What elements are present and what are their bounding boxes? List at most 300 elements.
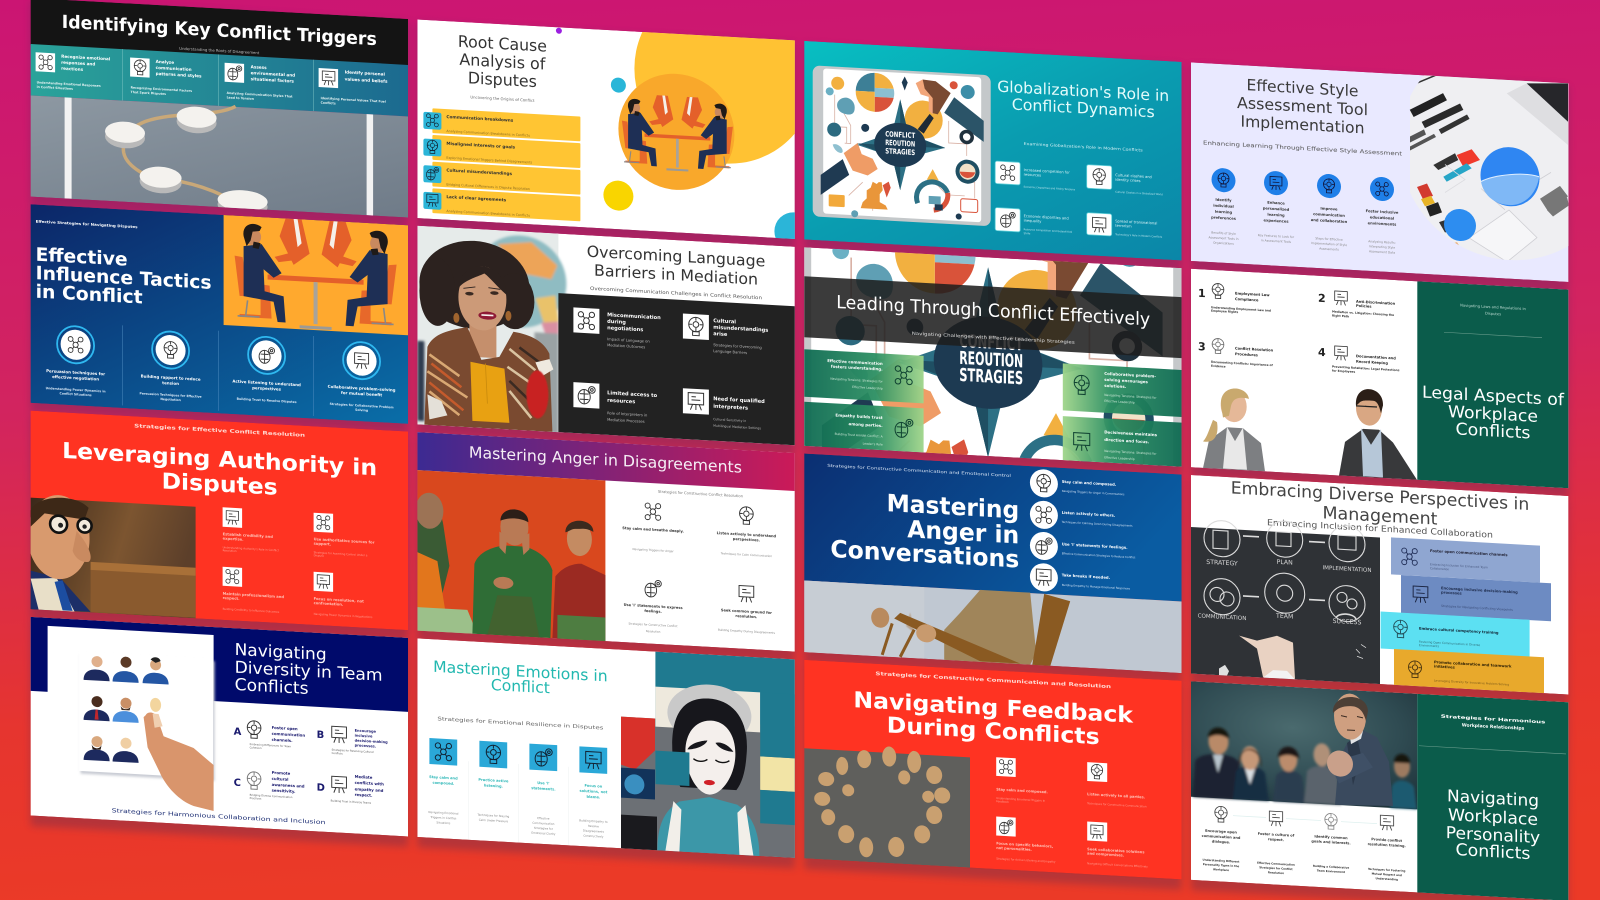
four principles: expertise. bbox=[223, 537, 244, 542]
four strategies: feelings. bbox=[644, 609, 662, 614]
four strategies: Use 'I' statements to express bbox=[624, 603, 683, 610]
panel: Overcoming Language Barriers in Mediation bbox=[417, 226, 795, 447]
numbered item 3: Procedures bbox=[1235, 352, 1258, 357]
title bbox=[458, 32, 547, 92]
four steps with round icons: Effective Communication Strategies to Reduce Conflict bbox=[1062, 551, 1135, 559]
title bbox=[587, 243, 765, 289]
stepped colored blocks bbox=[1381, 537, 1551, 694]
items A to D: Cohesion bbox=[250, 745, 262, 750]
teal band with four columns: Lead to Tension bbox=[227, 95, 254, 101]
four strategy columns: Disagreements bbox=[583, 829, 605, 834]
title: Conflict bbox=[491, 676, 550, 697]
list of four causes: Lack of clear agreements bbox=[446, 194, 507, 202]
items A to D: respect. bbox=[355, 792, 373, 798]
dark panel with four challenges: Limited access to bbox=[607, 390, 658, 399]
callout: communication bbox=[804, 349, 924, 403]
stepped colored blocks: Strategies for Navigating Conflicting Viewpoints bbox=[1441, 604, 1513, 612]
title band: Navigating Challenges with Effective Leadership Strategies bbox=[912, 331, 1076, 346]
four factors: inequality bbox=[1024, 219, 1042, 224]
numbered item 4: for Employees bbox=[1332, 369, 1355, 374]
stepped colored blocks: Leveraging Diversity for Innovative Problem Solving bbox=[1434, 678, 1509, 687]
four habits row: Foster a culture of bbox=[1258, 832, 1295, 838]
four principles: Building Credibility to Influence Outcomes bbox=[223, 607, 280, 614]
callout: collaboration: solving encourages bbox=[1104, 377, 1149, 384]
four strategy columns: Stay calm and bbox=[429, 775, 458, 781]
four principles bbox=[223, 507, 375, 619]
panel: Navigating Feedback During Conflicts bbox=[804, 660, 1182, 879]
numbered item 3: Evidence bbox=[1211, 364, 1226, 369]
four steps: educational bbox=[1370, 215, 1394, 221]
four strategy columns: Constructively bbox=[583, 834, 604, 839]
four habits row: communication and bbox=[1202, 834, 1241, 840]
four tactics: Negotiation bbox=[160, 397, 181, 402]
title: Conflict Dynamics bbox=[1012, 95, 1155, 121]
panel: Mastering Anger in Conversations bbox=[804, 454, 1182, 673]
dark panel with four challenges: arise bbox=[713, 331, 728, 338]
four steps: learning bbox=[1215, 210, 1232, 215]
teal band with four columns: Assess bbox=[251, 64, 267, 70]
four strategy columns: Calm Under Pressure bbox=[479, 818, 508, 823]
items A to D: inclusive bbox=[355, 734, 373, 739]
four feedback tips: and compromises. bbox=[1087, 852, 1124, 858]
four steps: Assessment Data bbox=[1369, 249, 1395, 255]
title: Mastering bbox=[887, 489, 1019, 524]
dark panel with four challenges: Language Barriers bbox=[713, 349, 747, 355]
four tactics: Understanding Power Dynamics in bbox=[46, 386, 106, 393]
four strategy columns: statements. bbox=[531, 786, 556, 792]
teal band with four columns: responses and bbox=[61, 60, 95, 67]
subtitle: Strategies for Constructive Conflict Resolution bbox=[658, 490, 744, 498]
four strategy columns: Use 'I' bbox=[537, 781, 550, 786]
panel: Effective Influence Tactics in Conflict bbox=[31, 204, 408, 424]
panel: Globalization's Role in Conflict Dynamics bbox=[804, 41, 1182, 260]
title bbox=[1231, 478, 1529, 535]
four habits row: Strategies for Conflict bbox=[1259, 865, 1293, 871]
photo: design desk in circular crop bbox=[1410, 75, 1568, 260]
title bbox=[1237, 76, 1368, 138]
four principles: Resolution bbox=[223, 548, 237, 553]
items A to D: Bridging Diverse Communication bbox=[250, 793, 293, 799]
stepped colored blocks: processes bbox=[1441, 590, 1463, 596]
stepped colored blocks: Environments bbox=[1419, 643, 1439, 648]
four factors bbox=[995, 160, 1163, 243]
four steps: Organizations bbox=[1213, 241, 1234, 246]
four strategies: Building Empathy During Disagreements bbox=[718, 628, 775, 635]
illustration: conflict compass poster: STRAGIES bbox=[885, 146, 915, 157]
four tactics: Building Trust to Resolve Disputes bbox=[237, 397, 297, 404]
panel: Identifying Key Conflict Triggers bbox=[31, 0, 408, 225]
four habits row: Mutual Respect and bbox=[1372, 872, 1402, 877]
illustration: conflict compass poster: REOUTION bbox=[885, 138, 915, 149]
four factors: Spread of transnational bbox=[1115, 219, 1157, 226]
callout: empathy: Building Trust Amidst Conflict: A bbox=[835, 432, 884, 439]
items A to D: Building Trust in Diverse Teams bbox=[331, 799, 372, 805]
title: Analysis of bbox=[459, 50, 546, 74]
stepped colored blocks: Encourage inclusive decision-making bbox=[1441, 586, 1518, 595]
four factors: terrorism bbox=[1115, 224, 1132, 229]
stepped colored blocks: Embracing Inclusion for Enhanced Team bbox=[1430, 562, 1488, 569]
photo: smiling woman in front of a globe bbox=[417, 226, 566, 434]
photo: chalkboard diagram: PLAN bbox=[1277, 559, 1293, 567]
title: Management bbox=[1323, 503, 1438, 530]
dark panel with four challenges: misunderstandings bbox=[713, 325, 768, 334]
panel: Navigating Workplace Personality Conflicts bbox=[1191, 681, 1568, 900]
subtitle: Uncovering the Origins of Conflict bbox=[470, 94, 535, 103]
four steps: in Assessment Tools bbox=[1261, 238, 1291, 244]
four steps: Analyzing Results: bbox=[1368, 239, 1396, 245]
items A to D bbox=[234, 720, 388, 808]
numbered item 4: Preventing Retaliation: Legal Protections bbox=[1332, 365, 1400, 372]
four habits row: Resolution bbox=[1268, 870, 1284, 875]
teal band with four columns: reactions bbox=[61, 66, 84, 72]
four strategies: Stay calm and breathe deeply. bbox=[622, 526, 684, 534]
teal band with four columns: situational factors bbox=[251, 76, 294, 84]
callout: collaboration: Effective Leadership bbox=[1104, 399, 1135, 405]
four feedback tips: Understanding Emotional Triggers in bbox=[996, 796, 1045, 803]
four strategies bbox=[622, 500, 777, 640]
four strategy columns: Focus on bbox=[584, 784, 603, 789]
list of four causes: Communication breakdowns bbox=[446, 114, 514, 123]
background illustration: enlarged compass: CONFLICT bbox=[959, 331, 1024, 355]
dark panel with four challenges bbox=[558, 293, 795, 445]
four steps: preferences bbox=[1211, 216, 1237, 221]
four steps with round icons: Listen actively to others. bbox=[1062, 510, 1116, 518]
title band bbox=[804, 276, 1182, 358]
four strategy columns: listening. bbox=[484, 784, 503, 789]
items A to D: C bbox=[234, 778, 241, 789]
four tactics: effective negotiation bbox=[52, 374, 99, 382]
four steps with round icons: Navigating Triggers for Anger in Conversations bbox=[1062, 489, 1125, 496]
four habits row: respect. bbox=[1268, 837, 1284, 842]
four steps: personalized bbox=[1263, 206, 1290, 212]
callout: communication: Navigating Tensions: Strategies for bbox=[830, 377, 883, 384]
four feedback tips: Stay calm and composed. bbox=[996, 787, 1048, 794]
four strategy columns: Effective bbox=[537, 816, 550, 821]
callout: communication: Effective communication bbox=[827, 358, 883, 366]
callout: empathy: among parties. bbox=[849, 421, 883, 428]
four strategy columns: Practice active bbox=[478, 778, 509, 783]
numbered item 4 bbox=[1318, 345, 1400, 376]
four strategy columns: Navigating Emotional bbox=[428, 810, 459, 816]
numbered item 2: Policies bbox=[1356, 304, 1372, 309]
items A to D: empathy and bbox=[355, 786, 384, 793]
four strategies: Strategies for Constructive Conflict bbox=[629, 621, 679, 628]
title bbox=[36, 245, 212, 312]
subtitle: Overcoming Communication Challenges in Conflict Resolution bbox=[590, 286, 762, 301]
four strategy columns: Triggers in Conflict bbox=[429, 815, 457, 821]
teal band with four columns bbox=[31, 44, 408, 116]
items A to D: Practices bbox=[250, 796, 262, 801]
callout: collaboration: Collaborative problem- bbox=[1104, 371, 1156, 379]
numbered item 2: Anti-Discrimination bbox=[1356, 300, 1396, 306]
title: Implementation bbox=[1241, 113, 1365, 137]
list of four causes: Analyzing Communication Breakdowns in Conflicts bbox=[446, 209, 530, 218]
dark panel with four challenges: during bbox=[607, 319, 626, 326]
photo: three men talking on orange backdrop bbox=[415, 470, 605, 642]
four steps: Foster inclusive bbox=[1366, 209, 1399, 215]
four strategies: Listen actively to understand bbox=[717, 531, 777, 538]
collage: woman with closed eyes bbox=[621, 650, 795, 858]
subtitle: Understanding the Roots of Disagreement bbox=[179, 46, 260, 55]
illustration: negotiation at table bbox=[224, 215, 408, 335]
dark panel with four challenges: Impact of Language on bbox=[607, 337, 650, 344]
numbered item 3: Conflict Resolution bbox=[1235, 346, 1274, 353]
gradient header with title bbox=[417, 432, 795, 491]
items A to D: Promote bbox=[272, 770, 291, 776]
green side panel bbox=[1417, 281, 1568, 488]
numbered item 2 bbox=[1318, 290, 1396, 321]
four strategies: Seek common ground for bbox=[721, 608, 772, 615]
four habits row: Personality Types in the bbox=[1203, 862, 1239, 868]
numbered item 1: Compliance bbox=[1235, 297, 1259, 302]
dark panel with four challenges: interpreters bbox=[713, 404, 748, 412]
four feedback tips: Strategies for Active Listening and Empathy bbox=[996, 856, 1056, 864]
title: Disputes bbox=[468, 68, 537, 91]
dark panel with four challenges: resources bbox=[607, 398, 635, 405]
four steps: experiences bbox=[1263, 218, 1289, 224]
callout: empathy: Leader's Role bbox=[863, 441, 883, 447]
background illustration: enlarged compass: REOUTION bbox=[959, 348, 1023, 372]
four feedback tips bbox=[996, 757, 1148, 869]
teal band with four columns: communication bbox=[156, 65, 192, 72]
items A to D: sensitivity. bbox=[272, 788, 296, 794]
callout: communication: Effective Leadership bbox=[852, 385, 883, 391]
numbered item 4: Record Keeping bbox=[1356, 360, 1388, 365]
illustration: conflict compass poster bbox=[813, 65, 991, 226]
title: Conflicts bbox=[235, 675, 309, 698]
list of four causes: Cultural misunderstandings bbox=[446, 167, 512, 176]
dark panel with four challenges: Multilingual Mediation Settings bbox=[713, 424, 761, 430]
list of four causes: Bridging Cultural Differences in Dispute Resolution bbox=[446, 182, 530, 191]
four strategy columns: Strategies for bbox=[534, 826, 554, 831]
title: Embracing Diverse Perspectives in bbox=[1231, 478, 1529, 515]
stepped colored blocks: initiatives bbox=[1434, 664, 1456, 670]
four factors: Technology's Role in Modern Conflicts bbox=[1115, 232, 1163, 239]
subtitle: Strategies for Harmonious Collaboration and Inclusion bbox=[112, 808, 326, 826]
green side panel: Conflicts bbox=[1456, 419, 1531, 443]
four principles: Strategies for Asserting Control Under a bbox=[314, 550, 368, 557]
items A to D: A bbox=[234, 727, 242, 738]
green side panel: Navigating Laws and Regulations in bbox=[1460, 303, 1527, 311]
four habits row: Workplace bbox=[1213, 867, 1229, 872]
numbered item 4: Documentation and bbox=[1356, 354, 1396, 360]
teal band with four columns: in Conflict Situations bbox=[37, 85, 73, 91]
stepped colored blocks: Embrace cultural competency training bbox=[1419, 627, 1499, 635]
title bbox=[830, 486, 1019, 573]
four habits row: Understanding Different bbox=[1203, 858, 1240, 864]
panel: Root Cause Analysis of Disputes bbox=[417, 0, 814, 254]
teal band with four columns: Recognize emotional bbox=[61, 54, 111, 61]
four steps with round icons: Take breaks if needed. bbox=[1062, 572, 1111, 580]
dark panel with four challenges: negotiations bbox=[607, 325, 643, 333]
panel: Navigating Diversity in Team Conflicts bbox=[31, 617, 408, 836]
four strategies: perspectives. bbox=[733, 537, 760, 542]
panel: Leveraging Authority in Disputes bbox=[28, 410, 408, 630]
dark panel with four challenges: Miscommunication bbox=[607, 312, 661, 321]
list of four causes: Analyzing Communication Breakdowns in Conflicts bbox=[446, 129, 530, 138]
teal band with four columns: Identify personal bbox=[345, 69, 385, 77]
panel: Embracing Diverse Perspectives in Management bbox=[1191, 475, 1568, 695]
four strategy columns: Techniques for Staying bbox=[477, 813, 509, 818]
dark panel with four challenges: Cultural bbox=[713, 318, 736, 325]
green side panel: Disputes bbox=[1485, 312, 1501, 316]
title bbox=[235, 640, 383, 702]
four strategies: Navigating Triggers for Anger bbox=[633, 547, 674, 553]
callout: communication: fosters understanding. bbox=[831, 364, 883, 372]
photo: woman and man in discussion bbox=[1203, 380, 1417, 480]
background illustration: enlarged compass bbox=[804, 205, 1182, 530]
four principles: Use authoritative sources for bbox=[314, 537, 375, 545]
four tactics: Building rapport to reduce bbox=[141, 373, 201, 382]
four habits row: resolution training. bbox=[1368, 842, 1406, 848]
items A to D: D bbox=[317, 782, 325, 794]
four steps: environments bbox=[1368, 221, 1397, 227]
four habits row: goals and interests. bbox=[1311, 839, 1351, 845]
items A to D: decision-making bbox=[355, 739, 388, 744]
green side panel: Workplace bbox=[1448, 805, 1538, 829]
panel: Legal Aspects of Workplace Conflicts bbox=[1191, 269, 1568, 488]
four tactics: Conflict Situations bbox=[60, 391, 92, 397]
photo: chalkboard diagram: IMPLEMENTATION bbox=[1322, 565, 1372, 574]
four factors: resources bbox=[1024, 173, 1041, 178]
four steps: Implementation of Style bbox=[1311, 241, 1347, 247]
four strategy columns bbox=[428, 738, 608, 847]
gradient header with title: Mastering Anger in Disagreements bbox=[469, 444, 742, 477]
title: Overcoming Language bbox=[587, 243, 765, 271]
stepped colored blocks: Promote collaboration and teamwork bbox=[1434, 660, 1512, 669]
title: Leveraging Authority in bbox=[62, 439, 377, 481]
title: Conversations bbox=[830, 535, 1019, 573]
four tactics: Collaborative problem-solving bbox=[328, 384, 396, 393]
items A to D: awareness and bbox=[272, 782, 305, 789]
teal band with four columns: Conflicts bbox=[321, 101, 336, 105]
four steps bbox=[1208, 167, 1399, 255]
teal band with four columns: Analyze bbox=[156, 59, 174, 65]
items A to D: Strategies for Resolving Cultural bbox=[332, 748, 374, 754]
white image panel bbox=[48, 626, 214, 703]
four habits row: Understanding bbox=[1375, 876, 1398, 881]
illustration: diverse team card and hand bbox=[79, 651, 215, 811]
teal band with four columns: values and beliefs bbox=[345, 76, 388, 84]
four steps: learning bbox=[1267, 213, 1285, 218]
four factors: Strife bbox=[1024, 231, 1031, 236]
teal band with four columns: Understanding Emotional Responses bbox=[37, 80, 101, 88]
title: Influence Tactics bbox=[36, 263, 212, 294]
green side panel: Conflicts bbox=[1456, 840, 1531, 863]
numbered item 1: Employee Rights bbox=[1211, 309, 1239, 314]
four tactics: Persuasion techniques for bbox=[46, 368, 105, 376]
teal band with four columns: Recognizing Environmental Factors bbox=[131, 86, 192, 93]
green side panel: Personality bbox=[1446, 823, 1540, 847]
four feedback tips: not personalities. bbox=[996, 846, 1032, 852]
title: Effective bbox=[36, 245, 128, 271]
panel: Mastering Emotions in Conflict bbox=[417, 638, 795, 858]
dark panel with four challenges: Cultural Sensitivity in bbox=[713, 417, 746, 423]
four steps: Identify bbox=[1215, 198, 1232, 203]
list of four causes bbox=[423, 108, 580, 221]
photo: chalkboard diagram bbox=[1191, 516, 1380, 684]
title: Assessment Tool bbox=[1237, 94, 1368, 119]
four tactics: perspectives bbox=[252, 385, 282, 392]
four steps: Interpreting Style bbox=[1369, 244, 1395, 250]
green side panel: Navigating bbox=[1447, 786, 1539, 810]
items A to D: B bbox=[317, 730, 324, 741]
eyebrow: Strategies for Constructive Communication and Resolution bbox=[875, 671, 1112, 690]
items A to D: conflicts with bbox=[355, 780, 384, 787]
four steps with round icons: Use 'I' statements for feelings. bbox=[1062, 541, 1128, 550]
numbered item 3 bbox=[1198, 337, 1274, 371]
items A to D: Foster open bbox=[272, 725, 298, 731]
title: During Conflicts bbox=[887, 713, 1100, 750]
four habits row: Encourage open bbox=[1205, 829, 1237, 835]
green side panel: Legal Aspects of bbox=[1422, 383, 1565, 409]
four strategy columns: solutions, not bbox=[579, 789, 608, 794]
four steps: communication bbox=[1313, 212, 1345, 218]
four principles: Navigating Power Dynamics in Negotiations bbox=[314, 612, 373, 619]
callout: collaboration: Navigating Tensions: Strategies for bbox=[1104, 393, 1157, 400]
four factors: Cultural Clashes in a Globalized World bbox=[1115, 190, 1163, 196]
items A to D: Mediate bbox=[355, 774, 373, 780]
background illustration: enlarged compass: STRAGIES bbox=[959, 365, 1023, 389]
four steps with round icons: Building Empathy to Manage Emotional Responses bbox=[1062, 583, 1131, 591]
numbered item 1: Understanding Employment Law and bbox=[1211, 305, 1271, 313]
items A to D: processes. bbox=[355, 743, 376, 749]
four feedback tips: Techniques for Constructive Communication bbox=[1086, 801, 1147, 809]
four strategies: Techniques for Calm Communication bbox=[720, 551, 772, 558]
teal band with four columns: environmental and bbox=[251, 70, 295, 78]
four steps: Benefits of Style bbox=[1211, 231, 1236, 236]
four factors: Economic disparities and bbox=[1024, 214, 1069, 221]
callout: decisiveness: Navigating Tensions: Strategies for bbox=[1104, 449, 1157, 456]
numbered item 3: 3 bbox=[1198, 340, 1206, 354]
callout: collaboration: solutions. bbox=[1104, 383, 1127, 389]
four steps with round icons: Techniques for Calming Down During Disagreements bbox=[1061, 520, 1133, 528]
four steps: Steps for Effective bbox=[1315, 236, 1343, 242]
photo: man holding chair bbox=[804, 580, 1182, 673]
four feedback tips: Seek collaborative solutions bbox=[1087, 847, 1144, 854]
four factors: Economic Disparities and Rising Tensions bbox=[1024, 185, 1076, 192]
title bbox=[62, 439, 377, 506]
four strategy columns: Communication bbox=[532, 821, 555, 826]
four strategy columns: Resolve bbox=[588, 824, 599, 828]
callout: decisiveness: direction and focus. bbox=[1104, 437, 1150, 444]
eyebrow: Strategies for Effective Conflict Resolution bbox=[134, 423, 306, 439]
four habits row: Effective Communication bbox=[1257, 861, 1295, 867]
four strategies: Resolution bbox=[646, 629, 661, 634]
panel: Effective Style Assessment Tool Implementation bbox=[1191, 62, 1568, 282]
dark panel with four challenges: Mediation Processes bbox=[607, 418, 645, 424]
dark panel with four challenges: Role of Interpreters in bbox=[607, 411, 648, 418]
four tactics: for mutual benefit bbox=[341, 390, 382, 397]
items A to D: Embracing Differences for Team bbox=[250, 742, 292, 748]
four strategy columns: blame. bbox=[587, 795, 600, 800]
four feedback tips: Listen actively to all parties. bbox=[1087, 792, 1145, 799]
items A to D: Conflicts bbox=[332, 751, 343, 756]
eyebrow: Strategies for Constructive Communication and Emotional Control bbox=[827, 463, 1011, 478]
four habits row: Building a Collaborative bbox=[1313, 864, 1349, 870]
title bbox=[433, 658, 608, 700]
title: Globalization's Role in bbox=[997, 78, 1169, 105]
title band: Leading Through Conflict Effectively bbox=[836, 292, 1151, 330]
numbered item 2: Right Path bbox=[1332, 314, 1349, 318]
list of four causes: Exploring Emotional Triggers Behind Disagreements bbox=[446, 156, 532, 165]
items A to D: Encourage bbox=[355, 729, 377, 734]
photo: man pointing in front of team bbox=[1191, 681, 1417, 809]
green side panel: Workplace Relationships bbox=[1462, 722, 1525, 732]
dark panel with four challenges: Need for qualified bbox=[713, 396, 765, 405]
subtitle: Examining Globalization's Role in Modern Conflicts bbox=[1024, 141, 1143, 153]
numbered item 1: Employment Law bbox=[1235, 291, 1270, 297]
